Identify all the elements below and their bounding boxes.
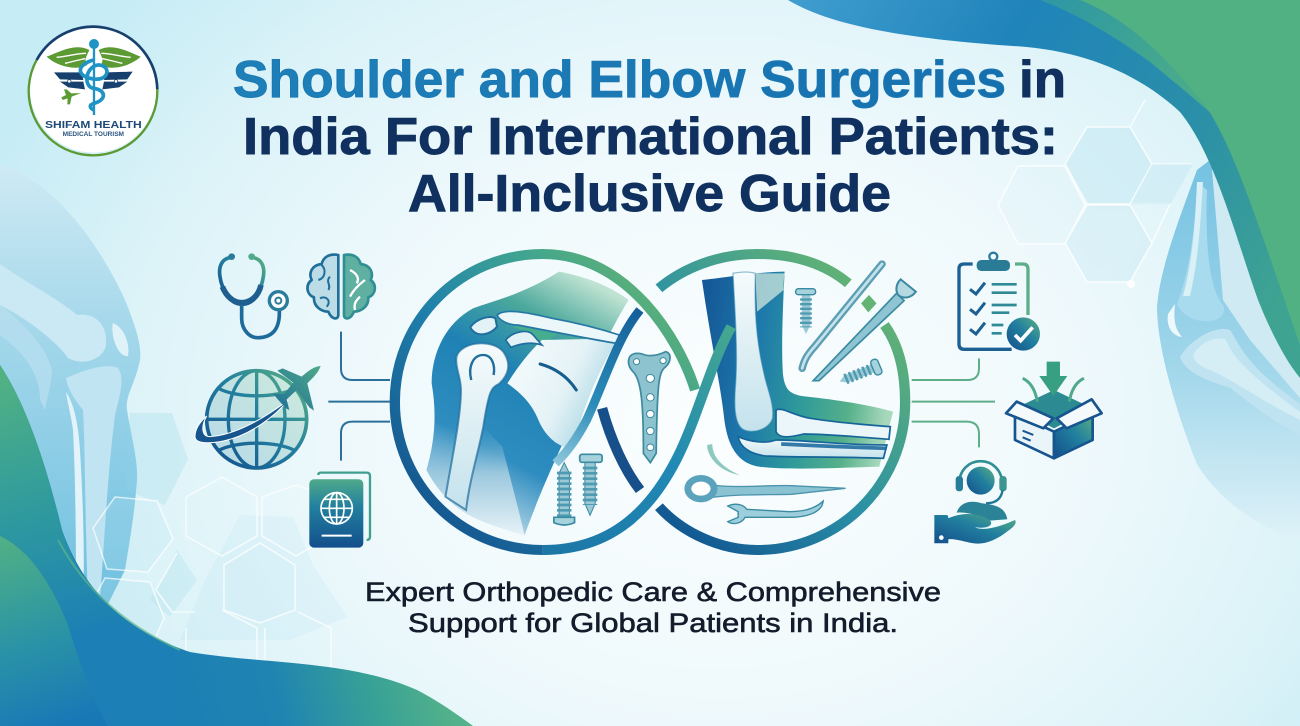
panel: elbow anatomy xyxy=(702,272,893,469)
infinity ring crossing strand xyxy=(543,327,731,550)
panel: shoulder anatomy xyxy=(426,272,629,535)
subtitle line 1: Expert Orthopedic Care & Comprehensive xyxy=(365,577,941,607)
icon: surgical pin xyxy=(802,264,882,368)
icon: angled screw xyxy=(837,358,883,389)
icon: clipboard checklist xyxy=(959,253,1040,351)
icon: wrench xyxy=(728,501,823,524)
ring fragment xyxy=(861,295,877,312)
background: right hexagon pattern xyxy=(998,100,1193,282)
subtitle line 2: Support for Global Patients in India. xyxy=(408,608,898,638)
infinity ring right lower arc xyxy=(659,325,905,550)
icon: brain xyxy=(307,255,375,318)
icon: bone plate xyxy=(628,352,670,463)
logo disc xyxy=(30,26,157,153)
logo plane xyxy=(61,89,81,104)
logo wings: navy xyxy=(54,72,133,89)
infinity ring left strand xyxy=(395,254,695,550)
title line 3: All-Inclusive Guide xyxy=(408,165,891,223)
connector lines left xyxy=(328,332,390,461)
title line 1 blue: Shoulder and Elbow Surgeries xyxy=(233,51,1006,109)
title xyxy=(233,51,1066,223)
infinity ring inner strand xyxy=(556,310,640,463)
subtitle xyxy=(365,577,941,638)
logo ring: green xyxy=(29,60,157,155)
swoosh xyxy=(707,444,740,475)
icon: ring spanner probe xyxy=(688,478,846,499)
left icons xyxy=(195,253,375,548)
icon: passport xyxy=(309,473,370,548)
logo caduceus xyxy=(80,39,107,115)
background: bottom-left wave xyxy=(0,365,473,726)
icon: screw with top head xyxy=(580,454,602,515)
icon: globe with plane xyxy=(195,366,321,468)
title line 1 navy: in xyxy=(1019,51,1066,109)
background: right elbow illustration xyxy=(1157,160,1300,540)
logo wings: green xyxy=(47,47,141,68)
logo xyxy=(29,26,157,155)
center infinity illustration xyxy=(395,254,916,550)
infinity ring right upper arc xyxy=(659,254,848,288)
title line 2: India For International Patients: xyxy=(243,108,1058,166)
logo name: SHIFAM HEALTH xyxy=(45,120,142,131)
connector lines right xyxy=(912,358,995,447)
icon: glowing dot xyxy=(1127,280,1135,288)
infinity ring dark strand xyxy=(602,408,640,490)
icon: screw upright xyxy=(554,463,575,525)
icon: small screw xyxy=(796,289,816,334)
icon: stethoscope xyxy=(220,253,287,338)
background: top-right wave xyxy=(788,0,1300,378)
icon: open box xyxy=(1006,362,1102,458)
logo tagline: MEDICAL TOURISM xyxy=(63,132,124,138)
icon: support agent with hand xyxy=(934,461,1016,544)
background: left hexagon pattern xyxy=(85,413,347,670)
background: left knee illustration xyxy=(0,165,140,610)
logo ring: navy xyxy=(37,27,157,89)
right icons xyxy=(934,253,1102,544)
icon: surgical nail xyxy=(813,279,916,381)
